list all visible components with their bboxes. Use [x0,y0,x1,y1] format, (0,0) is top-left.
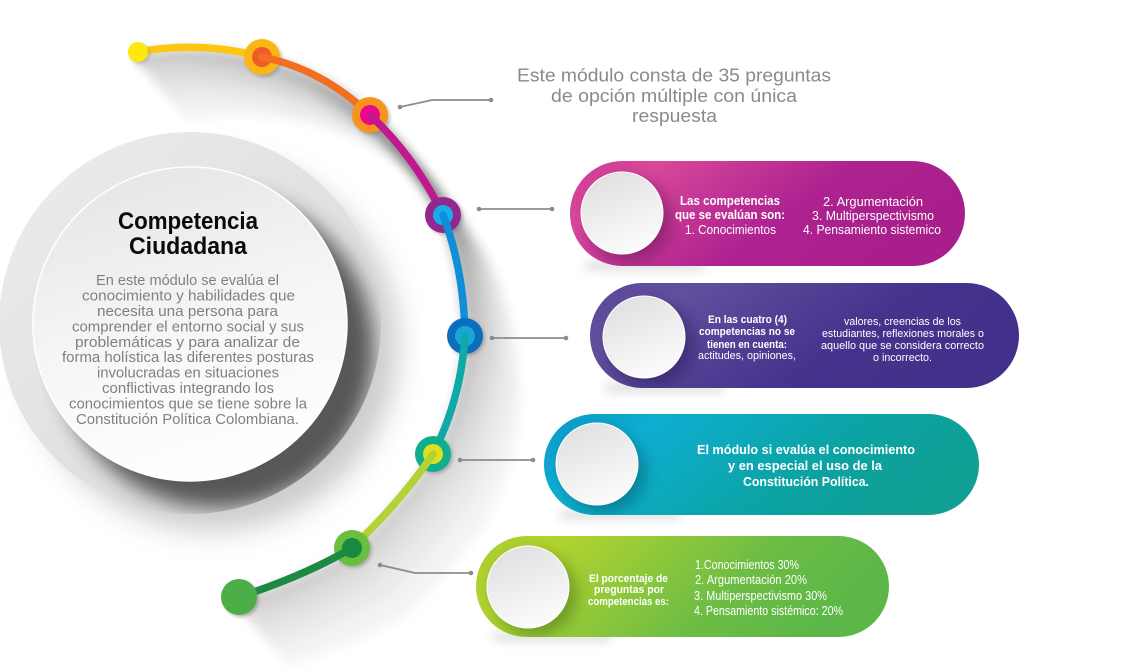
node 4 [433,318,485,454]
text block: module description: En este módulo se evalúa el [96,272,279,289]
panel: competencias evaluadas [570,161,965,270]
text: percentages: 4. Pensamiento sistémico: 20% [694,604,843,618]
connector 5 [378,563,473,575]
node 6 [239,530,372,597]
node 1 [244,39,370,115]
icon: blank disc [487,546,569,628]
connector 1 [398,98,493,109]
text block: module description: conocimiento y habilidades que [82,288,295,304]
text: lead: competencias no se [699,326,795,338]
text block: intro: Este módulo consta de 35 preguntas [517,64,831,86]
text block: module description: conflictivas integrando los [102,380,274,397]
text block: intro: de opción múltiple con única [551,85,798,106]
text: percentages: 1.Conocimientos 30% [695,558,799,572]
text block: intro [517,64,831,126]
icon: blank disc [603,296,685,378]
text: lead [698,314,796,362]
text: detail: aquello que se considera correcto [821,340,984,352]
text: lead [675,194,785,237]
connector 3 [490,336,568,340]
panel: sí evalúa [544,414,979,519]
text: lead: El porcentaje de [589,573,668,585]
text block: module description: forma holística las diferentes posturas [62,349,314,366]
connector 4 [458,458,535,462]
text: detail: valores, creencias de los [844,316,961,328]
text: detail: o incorrecto. [873,352,932,364]
text: statement: Constitución Política. [743,475,869,489]
node 2 [352,97,443,215]
connector 2 [477,207,554,211]
text: list: 2. Argumentación [823,195,923,209]
text: percentages: 2. Argumentación 20% [695,573,807,587]
text block: module description [62,272,314,428]
text: statement: y en especial el uso de la [728,459,883,473]
panel: porcentaje de preguntas [476,536,889,641]
node 5 [352,436,453,548]
text: lead: actitudes, opiniones, [698,350,796,362]
text block: intro: respuesta [632,105,718,126]
text block: module description: Constitución Política Colombiana. [76,411,299,428]
text: lead: tienen en cuenta: [707,339,787,351]
text: lead: En las cuatro (4) [708,314,787,326]
text: percentages [694,558,843,618]
heading: Competencia Ciudadana [118,208,259,260]
text: lead: que se evalúan son: [675,208,785,222]
timeline arc with nodes [128,39,485,617]
panel: no se tienen en cuenta [590,283,1019,392]
text: detail: estudiantes, reflexiones morales o [822,328,984,340]
long shadow of the arc [141,53,518,663]
text: lead: 1. Conocimientos [685,223,776,237]
text: percentages: 3. Multiperspectivismo 30% [694,589,827,603]
heading: Competencia Ciudadana: Competencia [118,208,259,235]
text: detail [821,316,984,364]
text: statement [697,443,915,489]
text block: module description: conocimientos que se tiene sobre la [69,396,308,412]
text block: module description: comprender el entorno social y sus [72,318,304,336]
text: lead: preguntas por [594,584,665,596]
text: lead: Las competencias [680,194,780,208]
start dot: yellow [128,42,262,64]
text: statement: El módulo si evalúa el conocimiento [697,443,915,457]
text: lead: competencias es: [588,596,669,608]
panel: main circle [0,132,398,531]
icon: blank disc [581,172,663,254]
text: list: 4. Pensamiento sistemico [803,223,941,237]
text block: module description: necesita una persona para [97,303,279,320]
text block: module description: problemáticas y para analizar de [75,334,300,351]
text: lead [588,573,669,608]
text: list: 3. Multiperspectivismo [812,209,934,223]
icon: blank disc [556,423,638,505]
text: list [803,195,941,237]
node 3 [425,197,465,336]
heading: Competencia Ciudadana: Ciudadana [129,233,248,260]
end dot: green [221,579,259,617]
text block: module description: involucradas en situaciones [97,364,279,382]
